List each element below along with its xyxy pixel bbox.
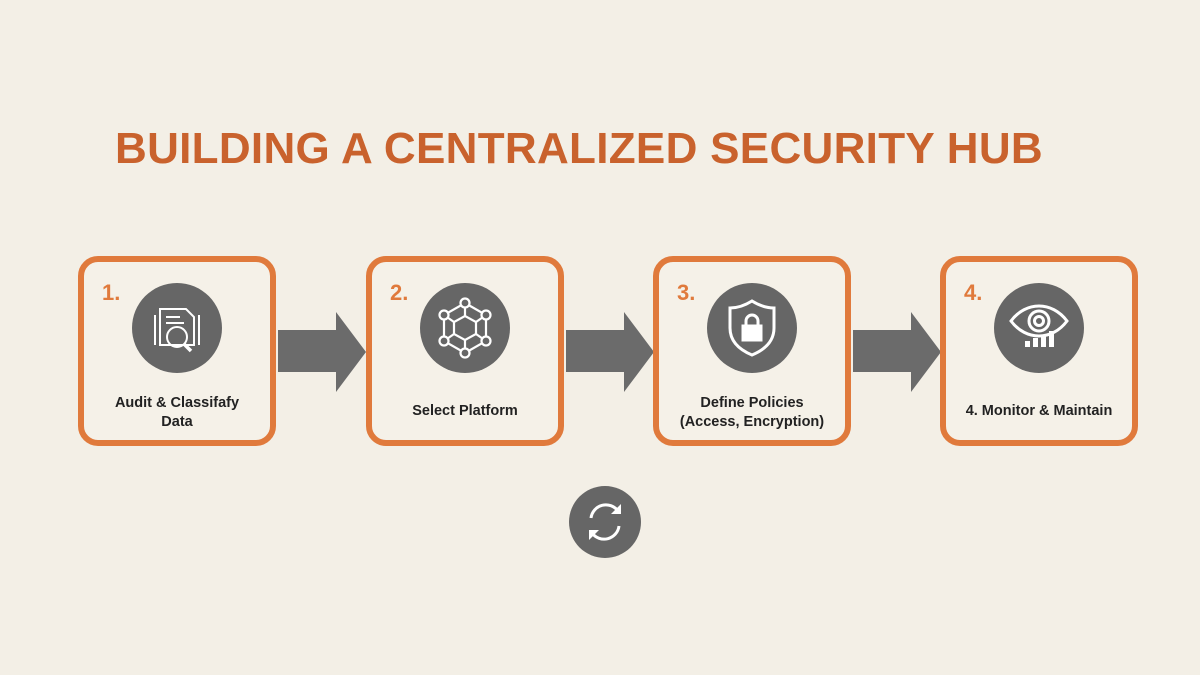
number 4: 4. [964,280,982,305]
number 2: 2. [390,280,408,305]
step 3 [653,256,851,446]
label: Data [161,414,193,430]
icon: eye with bars [994,283,1084,373]
step 4 [940,256,1138,446]
arrow 3 [853,312,940,392]
number 3: 3. [677,280,695,305]
step 2 [366,256,564,446]
arrow 1 [278,312,366,392]
label: Audit & Classifafy [115,395,239,411]
label [115,395,239,430]
icon: document magnifier [132,283,222,373]
icon: network hexagon [420,283,510,373]
icon: shield lock [707,283,797,373]
icon: cycle [569,486,641,558]
label: (Access, Encryption) [680,414,824,430]
title: BUILDING A CENTRALIZED SECURITY HUB [115,124,1043,173]
label [680,395,824,430]
label: Define Policies [700,395,804,411]
step 1 [78,256,276,446]
number 1: 1. [102,280,120,305]
arrow 2 [566,312,653,392]
label: 4. Monitor & Maintain [966,403,1112,419]
label: Select Platform [412,403,518,419]
